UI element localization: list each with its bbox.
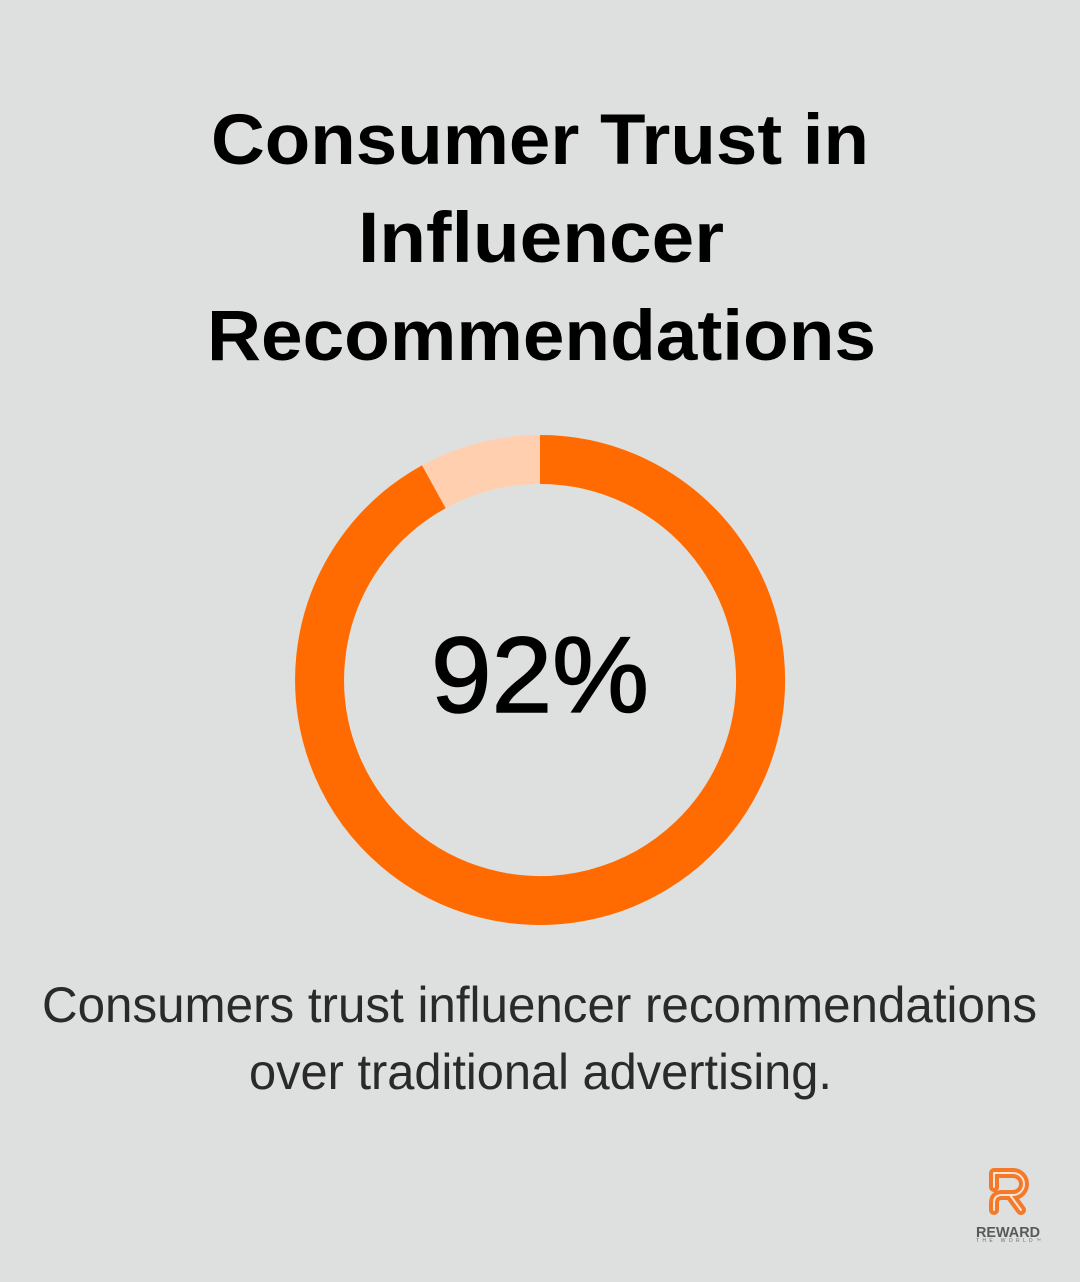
description text — [42, 977, 1037, 1100]
donut value: 92% — [431, 614, 649, 735]
title: Consumer Trust in — [211, 101, 869, 180]
title: Influencer — [358, 199, 724, 278]
description text: over traditional advertising. — [249, 1044, 832, 1100]
donut chart: 92% — [320, 460, 761, 900]
logo: Reward the World — [976, 1173, 1041, 1244]
icon: R mark — [994, 1173, 1024, 1210]
title: Recommendations — [207, 297, 876, 376]
logo tagline: THE WORLD™ — [976, 1238, 1041, 1244]
description text: Consumers trust influencer recommendations — [42, 977, 1037, 1033]
logo wordmark: REWARD — [976, 1225, 1040, 1241]
title — [207, 101, 876, 376]
